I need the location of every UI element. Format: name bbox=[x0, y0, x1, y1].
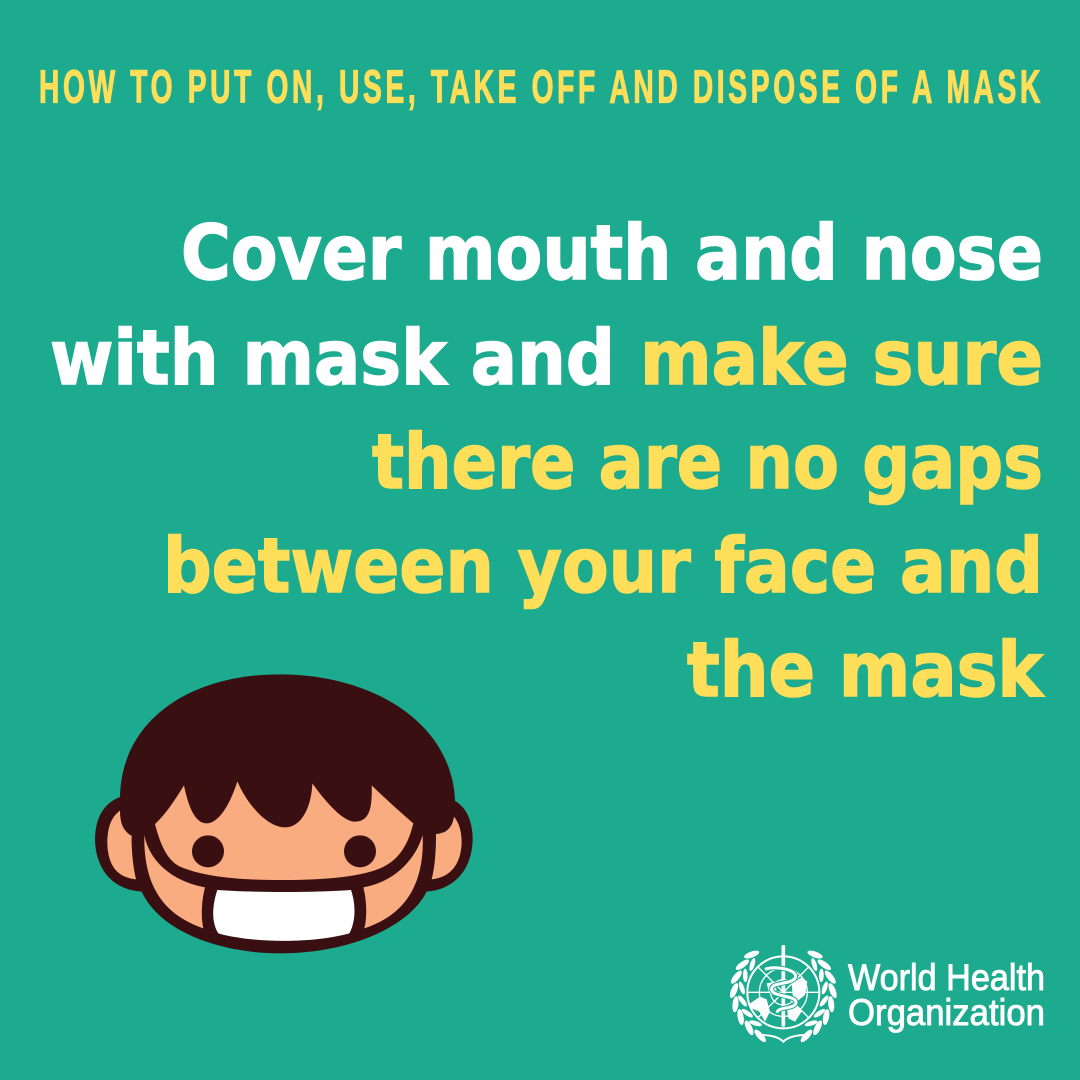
right eye bbox=[344, 835, 376, 867]
left eye bbox=[192, 835, 224, 867]
right laurel bbox=[799, 949, 838, 1044]
organization name: Organization bbox=[848, 992, 1045, 1033]
snake bbox=[765, 968, 796, 1013]
globe bbox=[747, 956, 819, 1028]
WHO emblem bbox=[728, 947, 838, 1044]
right ear bbox=[423, 800, 473, 892]
right cheek bbox=[363, 835, 423, 928]
headline message bbox=[50, 208, 1044, 714]
ribbon bbox=[760, 1035, 807, 1042]
continents bbox=[749, 997, 770, 1022]
logo: World Health Organization bbox=[728, 947, 1045, 1044]
hair and head outline bbox=[120, 674, 455, 953]
headline message: the mask bbox=[687, 625, 1044, 714]
organization name bbox=[848, 957, 1045, 1033]
staff bbox=[778, 947, 789, 1025]
headline message: with mask and bbox=[50, 313, 615, 402]
forehead skin bbox=[155, 781, 413, 880]
headline message: make sure bbox=[640, 313, 1043, 402]
left cheek bbox=[144, 835, 205, 928]
left laurel bbox=[728, 949, 768, 1044]
organization name: World Health bbox=[848, 957, 1045, 998]
white mask bbox=[213, 890, 355, 941]
left ear bbox=[95, 797, 145, 892]
icon: child's face wearing a mask bbox=[95, 674, 473, 953]
